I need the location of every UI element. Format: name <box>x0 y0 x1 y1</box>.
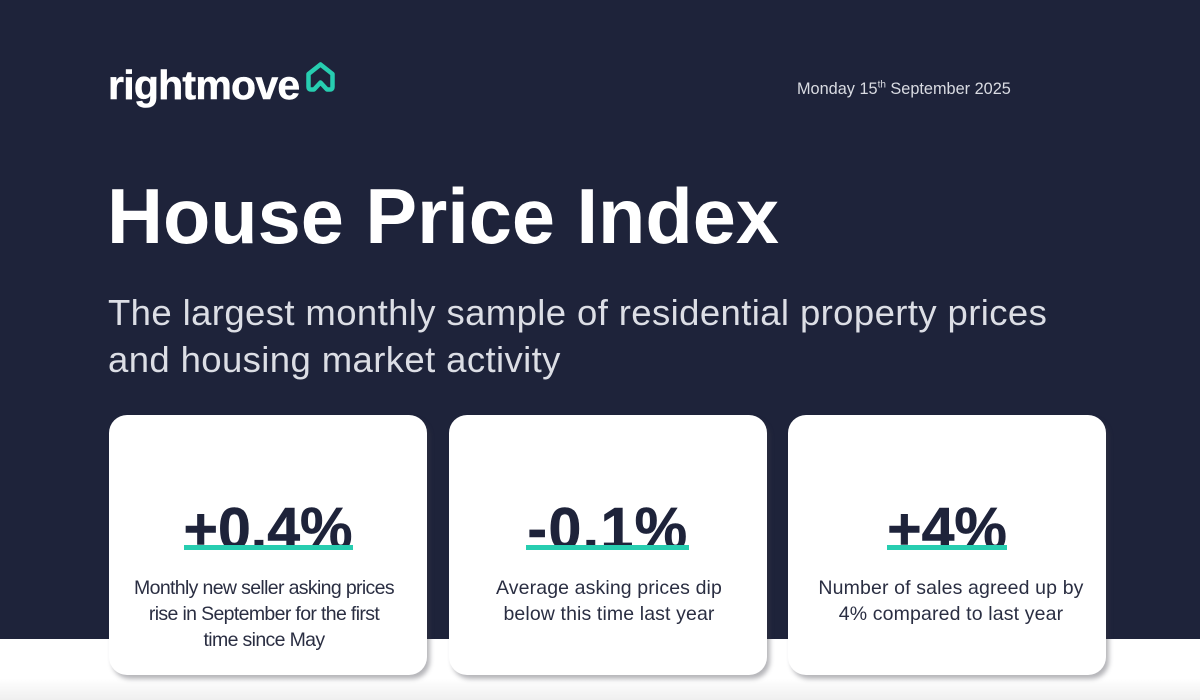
description <box>496 577 722 625</box>
logo wordmark: rightmove <box>108 62 299 108</box>
panel: sales agreed <box>788 415 1106 675</box>
stat: +0.4%: +0.4% <box>184 496 352 562</box>
underline <box>184 545 353 550</box>
stat: +4%: +4% <box>887 496 1007 562</box>
description: Number of sales agreed up by <box>818 577 1084 599</box>
subtitle: The largest monthly sample of residential property prices <box>108 292 1047 333</box>
stat: -0.1%: -0.1% <box>527 496 689 562</box>
icon: house <box>306 62 335 92</box>
underline <box>887 545 1007 550</box>
description: 4% compared to last year <box>839 603 1063 625</box>
description: Monthly new seller asking prices <box>134 577 394 599</box>
underline <box>526 545 689 550</box>
description: below this time last year <box>503 603 715 625</box>
description <box>134 577 394 651</box>
title: House Price Index <box>107 174 779 260</box>
panel: average asking prices <box>449 415 767 675</box>
description: rise in September for the first <box>149 603 379 625</box>
date: Monday 15th September 2025 <box>797 80 1011 98</box>
panel: monthly asking prices <box>109 415 427 675</box>
description: time since May <box>204 629 324 651</box>
description <box>818 577 1084 625</box>
description: Average asking prices dip <box>496 577 722 599</box>
logo: rightmove <box>108 62 335 108</box>
subtitle <box>108 292 1047 380</box>
bottom light gradient <box>0 639 1200 700</box>
subtitle: and housing market activity <box>108 339 561 380</box>
